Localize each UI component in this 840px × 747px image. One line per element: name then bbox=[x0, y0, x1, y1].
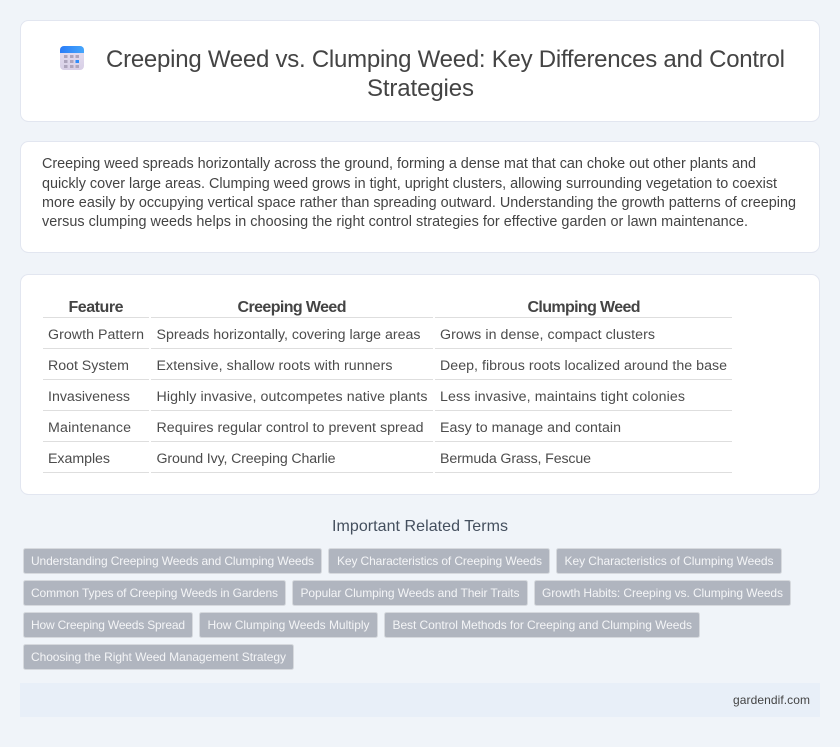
table row: invasiveness: Less invasive, maintains tight colonies bbox=[440, 389, 685, 405]
panel: title card bbox=[20, 20, 820, 122]
table row: growth pattern: Growth Pattern bbox=[48, 327, 144, 343]
table row: invasiveness bbox=[48, 389, 685, 405]
title: Creeping Weed vs. Clumping Weed: Key Differences and Control bbox=[106, 46, 785, 73]
related term tags bbox=[24, 548, 790, 670]
table row: maintenance: Easy to manage and contain bbox=[440, 420, 621, 436]
tag: Common Types of Creeping Weeds in Gardens bbox=[31, 586, 278, 600]
table header: Creeping Weed bbox=[238, 299, 346, 316]
heading: important related terms: Important Related Terms bbox=[332, 518, 508, 535]
tag bbox=[534, 580, 790, 606]
title: Strategies bbox=[367, 75, 474, 102]
table header: Feature bbox=[68, 299, 124, 316]
tag: How Creeping Weeds Spread bbox=[31, 618, 185, 632]
footer bbox=[20, 683, 820, 717]
table row: growth pattern: Grows in dense, compact clusters bbox=[440, 327, 655, 343]
table row: examples: Ground Ivy, Creeping Charlie bbox=[156, 451, 336, 467]
table row: root system: Deep, fibrous roots localized around the base bbox=[440, 358, 727, 374]
tag bbox=[200, 612, 378, 638]
tag bbox=[292, 580, 528, 606]
table row: root system bbox=[48, 358, 727, 374]
tag: Growth Habits: Creeping vs. Clumping Weeds bbox=[542, 586, 783, 600]
panel: description bbox=[20, 142, 820, 252]
tag: How Clumping Weeds Multiply bbox=[208, 618, 370, 632]
panel: comparison table bbox=[20, 274, 820, 494]
text block: description: quickly cover large areas. Clumping weed grows in tight, upright clusters, allowing surrounding vegetation to coexist bbox=[42, 176, 777, 192]
table row: growth pattern: Spreads horizontally, covering large areas bbox=[156, 327, 420, 343]
tag: Best Control Methods for Creeping and Clumping Weeds bbox=[392, 618, 692, 632]
tag bbox=[384, 612, 700, 638]
table row: examples bbox=[48, 451, 591, 467]
table row: examples: Examples bbox=[48, 451, 110, 467]
text block: description: more easily by occupying vertical space rather than spreading outward. Understanding the growth patterns of creeping bbox=[42, 195, 796, 211]
text block: description bbox=[42, 156, 796, 230]
tag: Key Characteristics of Clumping Weeds bbox=[564, 554, 774, 568]
text block: description: versus clumping weeds helps in choosing the right control strategies for effective garden or lawn maintenance. bbox=[42, 214, 748, 230]
tag bbox=[24, 580, 286, 606]
table row: growth pattern bbox=[48, 327, 655, 343]
table row: maintenance: Maintenance bbox=[48, 420, 131, 436]
tag: Choosing the Right Weed Management Strategy bbox=[31, 650, 286, 664]
table row: examples: Bermuda Grass, Fescue bbox=[440, 451, 591, 467]
tag bbox=[24, 548, 322, 574]
table header: Clumping Weed bbox=[528, 299, 640, 316]
tag: Key Characteristics of Creeping Weeds bbox=[337, 554, 542, 568]
icon: calendar bbox=[60, 46, 84, 70]
tag bbox=[556, 548, 782, 574]
footer: gardendif.com bbox=[733, 693, 810, 707]
text block: description: Creeping weed spreads horizontally across the ground, forming a dense mat that can choke out other plants and bbox=[42, 156, 756, 172]
table row: root system: Extensive, shallow roots with runners bbox=[156, 358, 392, 374]
table header bbox=[68, 299, 640, 316]
table row: maintenance: Requires regular control to prevent spread bbox=[156, 420, 424, 436]
tag bbox=[24, 612, 192, 638]
table row: maintenance bbox=[48, 420, 621, 436]
tag bbox=[24, 644, 294, 670]
table row: invasiveness: Highly invasive, outcompetes native plants bbox=[156, 389, 428, 405]
table row: root system: Root System bbox=[48, 358, 129, 374]
tag bbox=[328, 548, 550, 574]
title bbox=[106, 46, 785, 102]
table row: invasiveness: Invasiveness bbox=[48, 389, 130, 405]
tag: Popular Clumping Weeds and Their Traits bbox=[300, 586, 520, 600]
tag: Understanding Creeping Weeds and Clumping Weeds bbox=[31, 554, 314, 568]
